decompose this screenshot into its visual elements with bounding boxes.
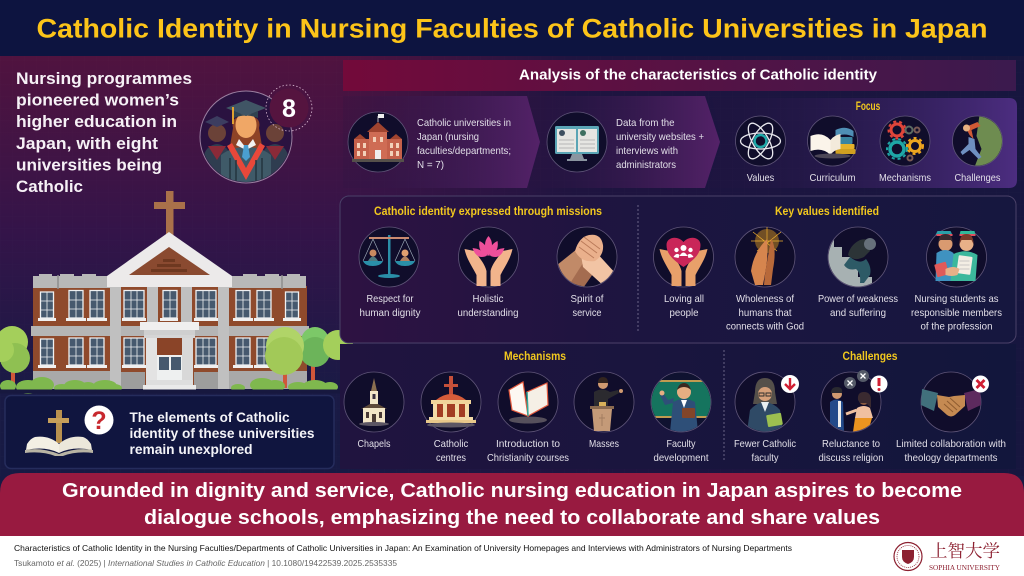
item: reluctance xyxy=(818,370,888,464)
text: unexplored elements: The elements of Catholic xyxy=(130,410,290,425)
icon: gears xyxy=(887,122,923,160)
panel: introduction xyxy=(16,70,312,196)
item: loving: Loving all xyxy=(664,293,704,305)
icon: nurses xyxy=(934,231,978,281)
item: wholeness: Wholeness of xyxy=(736,293,794,305)
icon: teacher at blackboard xyxy=(651,372,711,432)
step: universities: N = 7) xyxy=(417,159,444,171)
item: nursing students xyxy=(911,227,1002,332)
wings xyxy=(31,274,309,389)
heading: challenges: Challenges xyxy=(842,351,898,363)
windows xyxy=(40,290,299,365)
text: unexplored elements xyxy=(130,410,314,457)
badge: exclamation xyxy=(870,376,888,392)
icon: catholic centre building xyxy=(426,376,476,428)
icon: books xyxy=(810,128,856,158)
arrow: universities xyxy=(343,96,540,188)
text: unexplored elements: identity of these universities xyxy=(130,426,314,441)
item: catholic centres: Catholic xyxy=(434,438,468,450)
citation xyxy=(14,543,792,568)
intro text: pioneered women’s xyxy=(16,92,179,110)
item: catholic centres xyxy=(421,372,481,464)
item: weakness: Power of weakness xyxy=(818,293,898,305)
panel: findings xyxy=(340,196,1016,469)
cross on roof xyxy=(154,191,185,235)
focus: curriculum: Curriculum xyxy=(810,172,856,184)
icon: graduates xyxy=(200,91,292,190)
item: wholeness: connects with God xyxy=(726,320,804,332)
step: universities: faculties/departments; xyxy=(417,145,511,157)
item: loving xyxy=(654,227,714,319)
icon: red brick university xyxy=(352,114,404,162)
item: limited collaboration xyxy=(896,372,1006,464)
intro text: Catholic xyxy=(16,178,83,196)
item: introduction to christianity xyxy=(487,372,569,464)
focus: challenges xyxy=(952,115,1004,184)
badge: cross xyxy=(972,376,989,392)
focus: curriculum xyxy=(808,116,858,184)
callout: eight universities: 8 xyxy=(282,95,296,123)
item: wholeness xyxy=(726,227,804,332)
item: weakness xyxy=(818,227,898,319)
item: respect: human dignity xyxy=(360,307,421,319)
item: masses: Masses xyxy=(589,438,619,450)
panel: unexplored elements xyxy=(5,396,334,468)
heading: missions: Catholic identity expressed through missions xyxy=(374,206,602,218)
icon: joined hands xyxy=(558,234,613,286)
item: holistic: Holistic xyxy=(472,293,504,305)
step: data: university websites + xyxy=(616,131,704,143)
item: chapels: Chapels xyxy=(358,438,390,450)
trees behind xyxy=(0,326,30,384)
footer xyxy=(0,536,1024,576)
badge: down arrow xyxy=(781,375,799,393)
icon: lotus in hands xyxy=(464,236,512,286)
icon: two people talking xyxy=(830,387,873,432)
text: unexplored elements: remain unexplored xyxy=(130,442,252,457)
step: data xyxy=(547,112,704,172)
item: service xyxy=(557,227,617,319)
item: nursing students: Nursing students as xyxy=(914,293,998,305)
focus: values xyxy=(736,116,786,184)
heading: key values: Key values identified xyxy=(775,206,879,218)
item: nursing students: responsible members xyxy=(911,307,1002,319)
roof pediment xyxy=(107,232,232,287)
intro text xyxy=(16,70,192,196)
item: weakness: and suffering xyxy=(830,307,886,319)
step: data: Data from the xyxy=(616,117,675,129)
icon: open book xyxy=(509,382,548,424)
item: fewer catholic faculty xyxy=(734,372,799,464)
panel: focus xyxy=(708,98,1017,188)
item: nursing students: of the profession xyxy=(920,320,993,332)
illustration: university chapel building xyxy=(0,191,353,394)
icon: computer screen xyxy=(555,126,599,161)
portico and door xyxy=(140,322,199,390)
icon: praying hands xyxy=(751,227,783,285)
intro text: Japan, with eight xyxy=(16,135,159,153)
callout: eight universities xyxy=(266,85,312,131)
item: faculty development: Faculty xyxy=(666,438,696,450)
icon: person slumped on stairs xyxy=(828,238,876,289)
item: catholic centres: centres xyxy=(436,452,466,464)
title: Catholic Identity in Nursing Faculties of Catholic Universities in Japan xyxy=(36,14,988,44)
citation: Tsukamoto et al. (2025) | International Studies in Catholic Education | 10.1080/19422539.2025.2535335 xyxy=(14,558,397,568)
item: limited collaboration: theology departments xyxy=(904,452,998,464)
icon: question mark xyxy=(84,406,114,435)
item: fewer catholic faculty: Fewer Catholic xyxy=(734,438,796,450)
item: limited collaboration: Limited collaboration with xyxy=(896,438,1006,450)
item: service: Spirit of xyxy=(570,293,604,305)
icon: handshake xyxy=(921,389,981,416)
heading: focus: Focus xyxy=(856,101,880,113)
heading: analysis banner: Analysis of the characteristics of Catholic identity xyxy=(519,66,878,84)
intro text: higher education in xyxy=(16,113,177,131)
item: respect xyxy=(359,227,421,319)
heading: mechanisms: Mechanisms xyxy=(504,351,566,363)
conclusion banner: dialogue schools, emphasizing the need to collaborate and share values xyxy=(144,506,880,529)
icon: climber on cliff xyxy=(960,115,1004,167)
icon: chapel xyxy=(359,378,389,426)
item: chapels xyxy=(344,372,404,450)
logo: Sophia University: 上智大学 xyxy=(930,538,1000,563)
focus: mechanisms xyxy=(879,116,931,184)
step: universities xyxy=(348,112,511,172)
conclusion banner xyxy=(0,473,1024,536)
step: data: administrators xyxy=(616,159,676,171)
step: data: interviews with xyxy=(616,145,678,157)
icon: woman with folder xyxy=(747,378,783,432)
icon: atom xyxy=(740,120,780,162)
icon: book and cross xyxy=(25,410,93,456)
heading: analysis banner xyxy=(343,60,1016,91)
focus: values: Values xyxy=(747,172,774,184)
focus: challenges: Challenges xyxy=(954,172,1000,184)
conclusion banner: Grounded in dignity and service, Catholic nursing education in Japan aspires to become xyxy=(62,479,962,502)
trees in front xyxy=(265,327,353,388)
icon: heart in hands xyxy=(660,238,708,286)
logo: Sophia University: SOPHIA UNIVERSITY xyxy=(929,564,1000,572)
item: service: service xyxy=(572,307,602,319)
citation: Characteristics of Catholic Identity in the Nursing Faculties/Departments of Catholic Universities in Japan: An Examination of University Homepages and Interviews with Administrators of Nursing Departments xyxy=(14,543,792,553)
item: introduction to christianity: Christianity courses xyxy=(487,452,569,464)
item: holistic xyxy=(458,227,519,319)
icon: priest at lectern xyxy=(590,377,623,431)
item: wholeness: humans that xyxy=(738,307,792,319)
arrow: data xyxy=(530,96,720,188)
bushes xyxy=(0,377,338,394)
item: loving: people xyxy=(670,307,699,319)
item: fewer catholic faculty: faculty xyxy=(752,452,779,464)
item: introduction to christianity: Introduction to xyxy=(496,438,560,450)
focus: mechanisms: Mechanisms xyxy=(879,172,931,184)
item: respect: Respect for xyxy=(366,293,414,305)
icon: scales xyxy=(363,235,415,278)
title xyxy=(0,0,1024,56)
window sills xyxy=(38,318,301,368)
item: reluctance: discuss religion xyxy=(818,452,884,464)
item: masses xyxy=(574,372,634,450)
step: universities: Catholic universities in xyxy=(417,117,511,129)
step: universities: Japan (nursing xyxy=(417,131,479,143)
item: faculty development xyxy=(651,372,711,464)
logo: Sophia University xyxy=(894,538,1000,572)
intro text: universities being xyxy=(16,156,162,174)
panel: analysis flow xyxy=(343,96,1017,188)
item: reluctance: Reluctance to xyxy=(822,438,880,450)
badge: speech crosses xyxy=(844,370,869,389)
item: faculty development: development xyxy=(654,452,709,464)
intro text: Nursing programmes xyxy=(16,70,192,88)
icon: question mark: ? xyxy=(91,407,107,435)
item: holistic: understanding xyxy=(458,307,519,319)
